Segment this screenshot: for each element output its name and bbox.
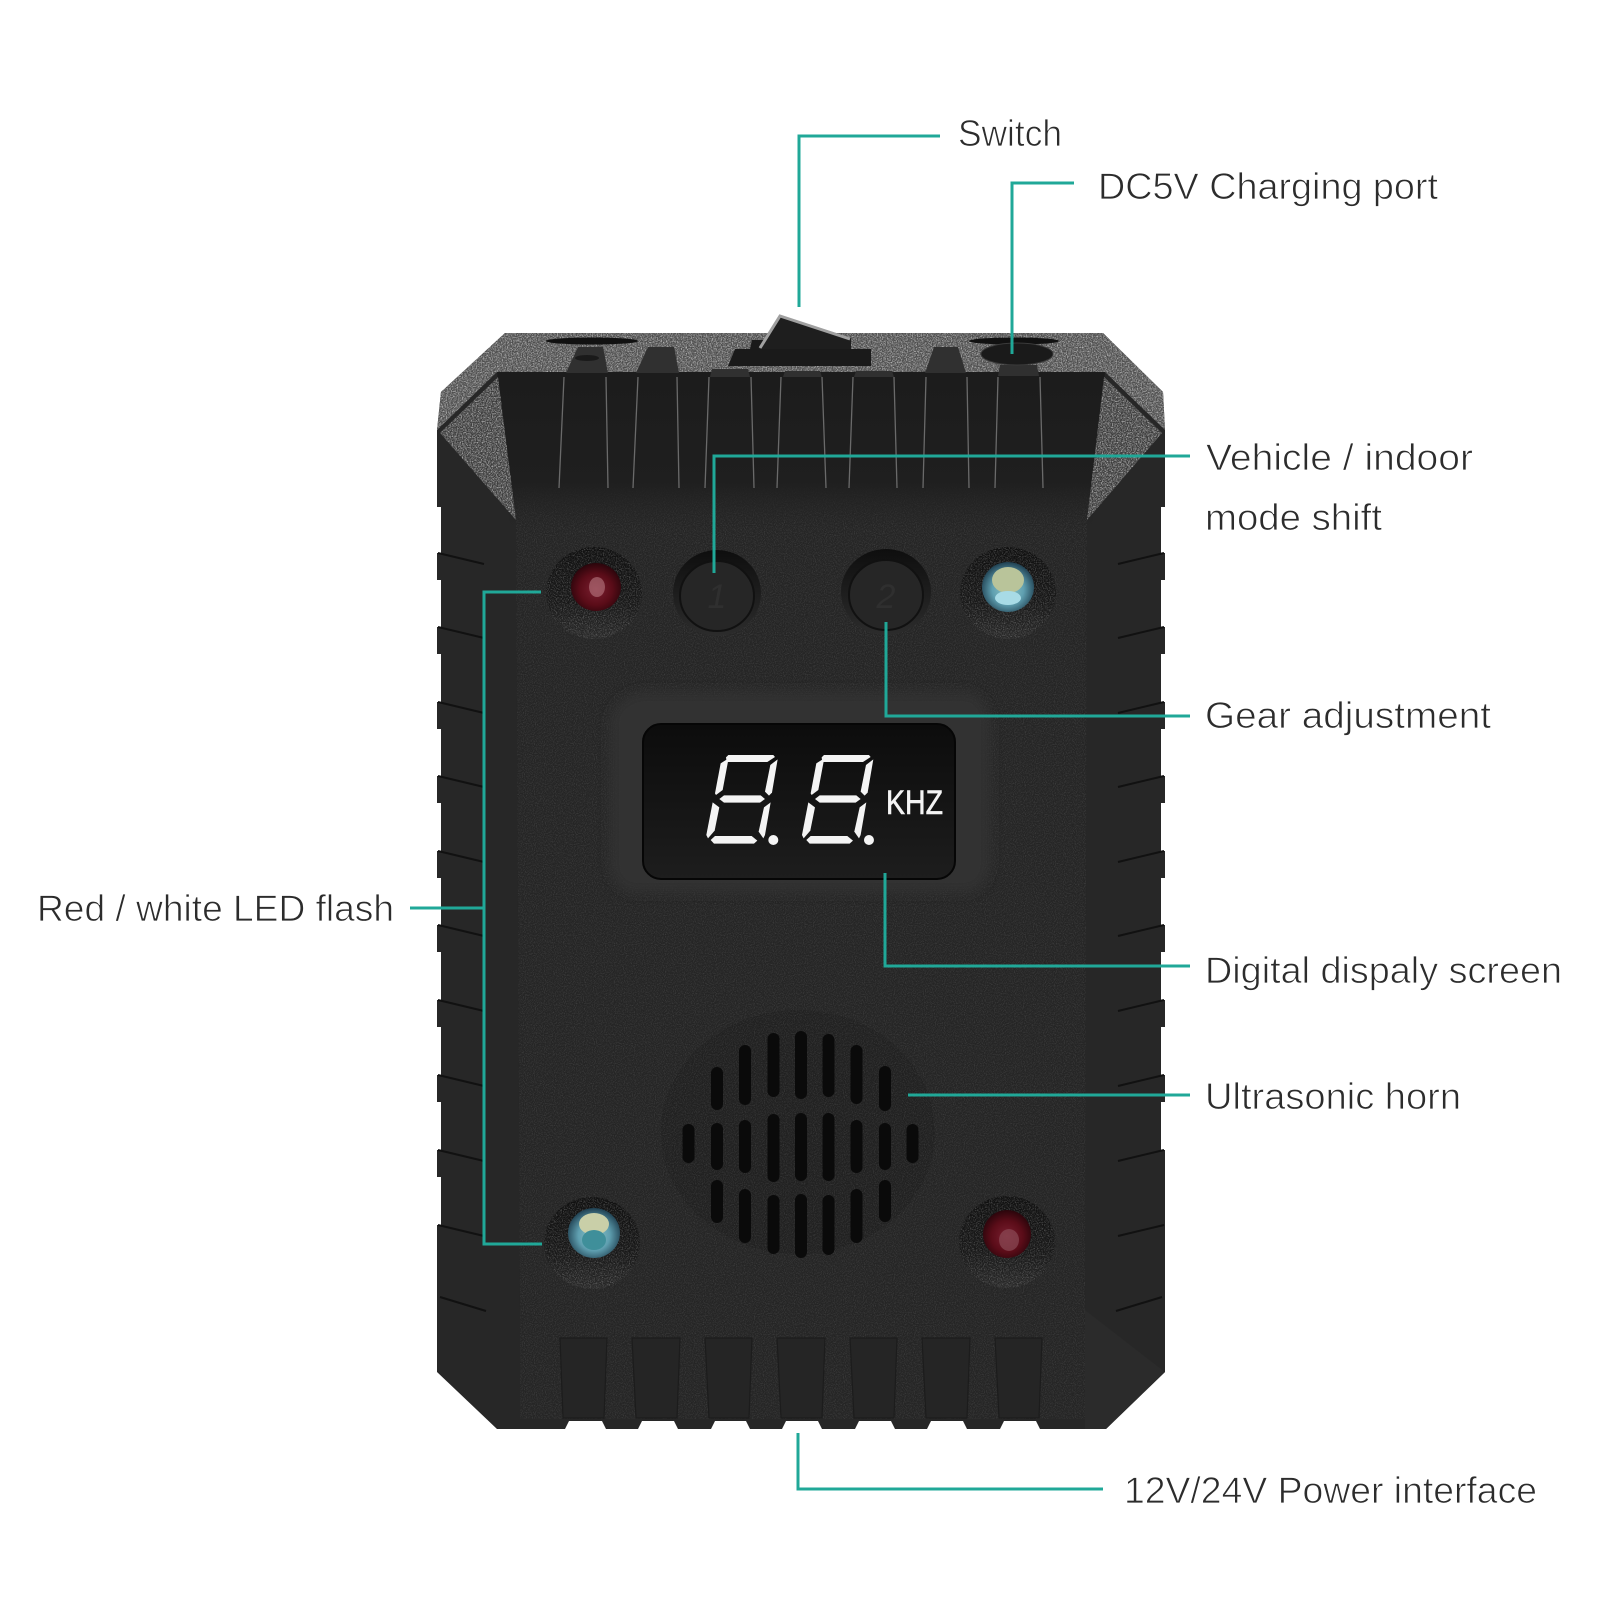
power leader line xyxy=(798,1433,1103,1489)
switch leader line xyxy=(799,136,940,307)
dc port hole xyxy=(981,343,1053,365)
digital display xyxy=(643,724,955,879)
gear leader line xyxy=(886,622,1190,716)
device body xyxy=(437,315,1165,1429)
led red top left xyxy=(546,547,642,639)
top strip xyxy=(437,333,1165,430)
seven segment digits xyxy=(706,755,874,845)
charging port label: DC5V Charging port xyxy=(1098,166,1439,207)
callout: power interface xyxy=(798,1433,1537,1511)
top right bevel xyxy=(1087,377,1162,520)
callout: mode shift xyxy=(714,437,1473,573)
callout: switch xyxy=(799,113,1062,307)
switch label: Switch xyxy=(958,113,1062,154)
rocker switch xyxy=(728,315,871,366)
led white bottom left xyxy=(544,1197,640,1289)
upper dark zone xyxy=(497,372,1105,530)
power label: 12V/24V Power interface xyxy=(1124,1470,1537,1511)
horn label: Ultrasonic horn xyxy=(1205,1076,1461,1117)
led white top right xyxy=(960,547,1056,639)
led label: Red / white LED flash xyxy=(37,888,394,929)
top left bevel xyxy=(440,377,516,520)
khz unit: KHZ xyxy=(886,784,943,822)
body shell xyxy=(437,333,1165,1429)
callout: charging port xyxy=(1012,166,1439,354)
center face xyxy=(497,372,1105,1419)
horn leader line xyxy=(908,1094,1190,1096)
callout: digital display xyxy=(885,873,1562,991)
display label: Digital dispaly screen xyxy=(1205,950,1562,991)
bottom right bevel xyxy=(1085,1310,1165,1429)
callout: mode shift: mode shift xyxy=(1205,497,1383,538)
charging port leader line xyxy=(1012,183,1074,354)
bottom ribs xyxy=(560,1338,1042,1418)
mode shift leader line xyxy=(714,456,1190,573)
top ribs xyxy=(559,377,1043,488)
display bezel xyxy=(610,692,990,892)
led bracket leader line xyxy=(484,592,542,1244)
button 2: 2 xyxy=(876,578,896,616)
button 1: 1 xyxy=(708,578,726,616)
gear label: Gear adjustment xyxy=(1205,695,1492,736)
button 2 xyxy=(841,549,931,635)
ultrasonic horn grille xyxy=(661,1010,935,1258)
callout: led flash xyxy=(37,592,542,1244)
led red bottom right xyxy=(959,1196,1055,1288)
callout: gear adjustment xyxy=(886,622,1492,736)
mode shift label: Vehicle / indoor xyxy=(1206,437,1473,478)
top tabs and slots xyxy=(546,338,1059,377)
side grip notches xyxy=(438,553,1164,1311)
display leader line xyxy=(885,873,1190,966)
button 1 xyxy=(673,550,761,636)
